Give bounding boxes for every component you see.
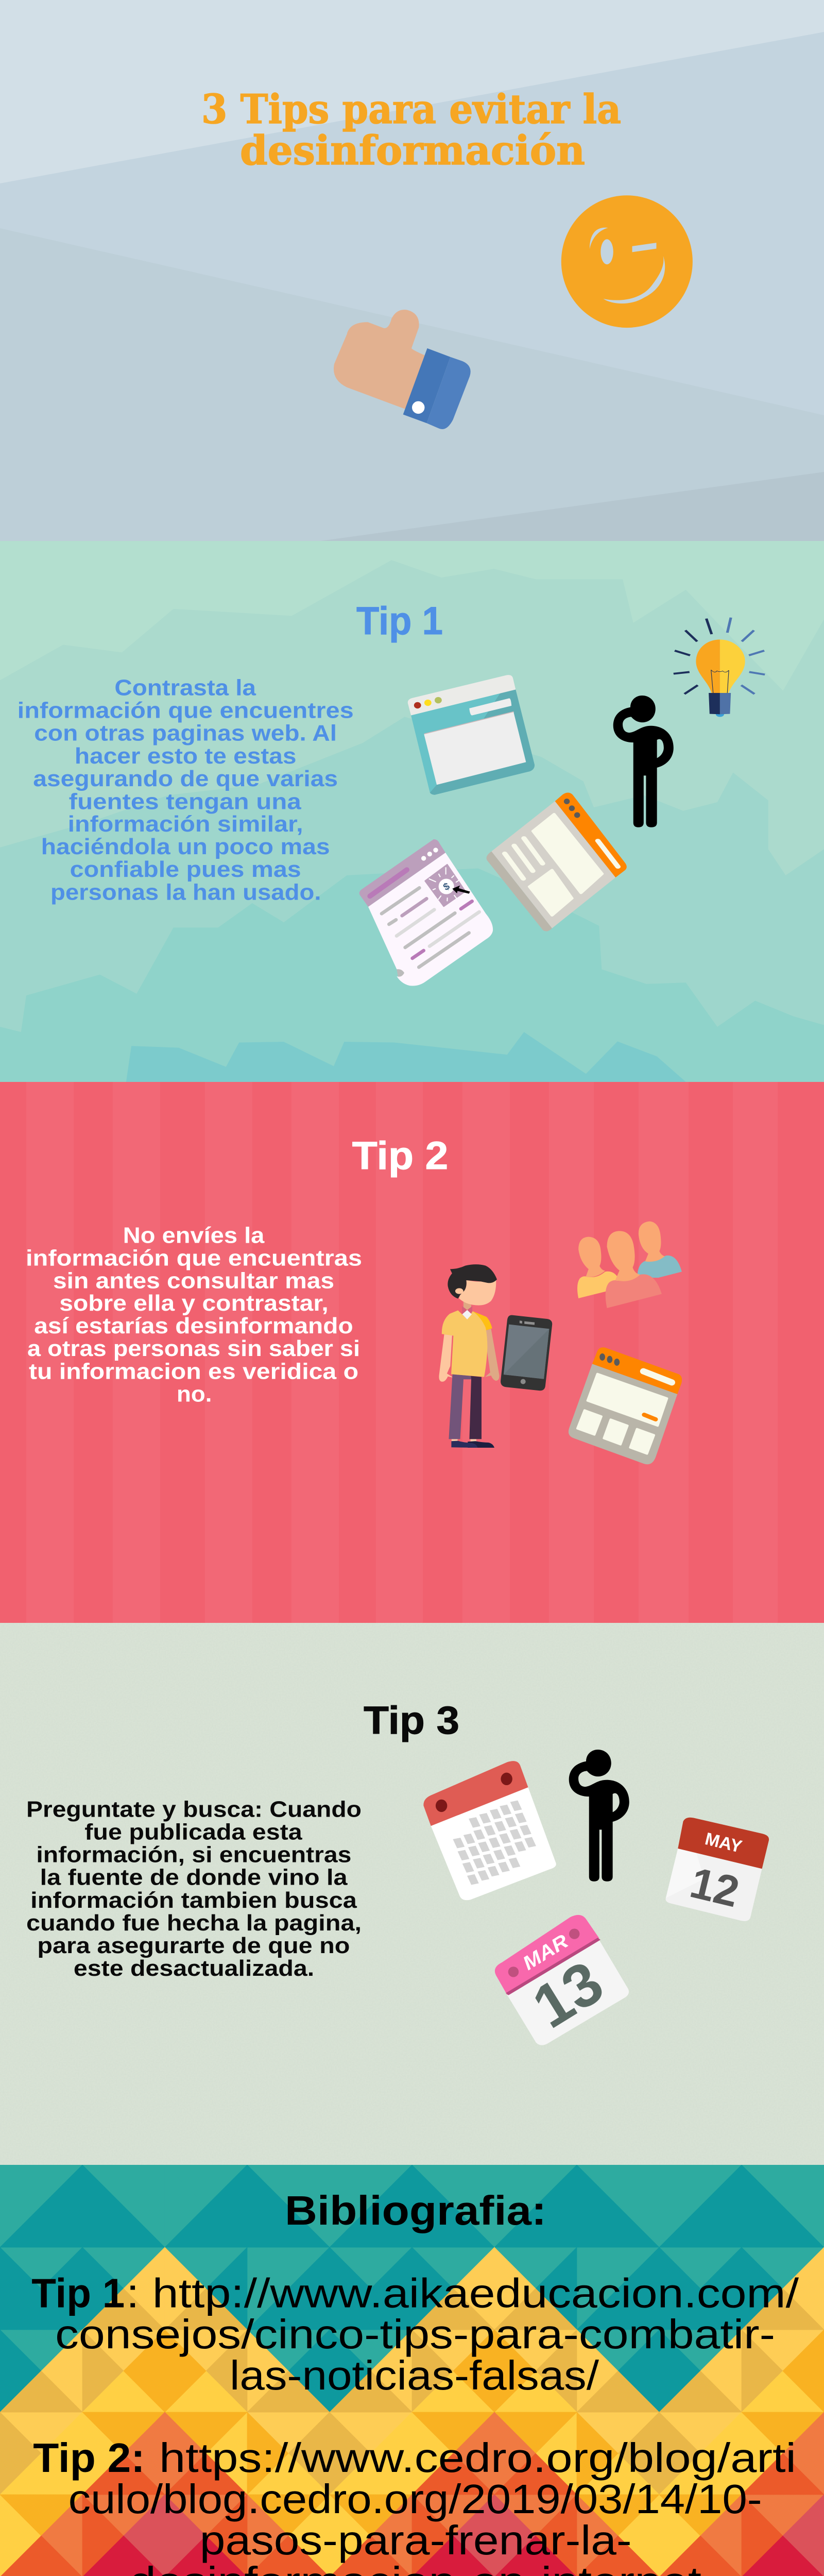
text block: tip 3: este desactualizada.	[74, 1956, 314, 1981]
title: desinformación	[240, 127, 585, 174]
icon: calendar May 12: MAY	[703, 1829, 744, 1857]
text block: tip 1: información similar,	[68, 811, 303, 837]
text block: source tip 1: las-noticias-falsas/	[230, 2352, 599, 2398]
text block: tip 2: sin antes consultar mas	[53, 1268, 334, 1293]
icon: calendar May 12	[666, 1818, 769, 1921]
text block: source tip 1: Tip 1	[31, 2270, 125, 2316]
panel: tip 1	[0, 541, 824, 1082]
panel: tip 2	[0, 1082, 824, 1623]
text block: tip 2	[26, 1223, 362, 1407]
icon: calendar Mar 13: 13	[522, 1948, 615, 2041]
icon: web document	[359, 839, 493, 986]
panel: header	[0, 0, 824, 541]
text block: source tip 2	[33, 2435, 796, 2576]
icon: smartphone	[501, 1315, 552, 1391]
panel: bibliography	[0, 2165, 824, 2576]
icon: thinking person	[613, 696, 674, 827]
text block: source tip 2: culo/blog.cedro.org/2019/03/14/10-	[68, 2476, 762, 2522]
text block: tip 1: con otras paginas web. Al	[34, 720, 337, 745]
heading: Tip 1: Tip 1	[356, 599, 443, 643]
text block: tip 1: fuentes tengan una	[69, 789, 301, 815]
text block: tip 1: información que encuentres	[18, 698, 354, 723]
text block: tip 2: a otras personas sin saber si	[27, 1336, 360, 1361]
text block: tip 3: cuando fue hecha la pagina,	[26, 1910, 362, 1936]
icon: winking face	[561, 195, 693, 328]
icon: man with shirt	[439, 1264, 500, 1448]
title: 3 Tips para evitar la	[201, 86, 621, 133]
text block: tip 1: confiable pues mas	[70, 857, 301, 882]
icon: browser window teal	[408, 675, 535, 795]
text block: source tip 1	[31, 2270, 799, 2398]
text block: tip 2: sobre ella y contrastar,	[59, 1291, 329, 1316]
text block: tip 3: la fuente de donde vino la	[40, 1865, 348, 1890]
text block: tip 1	[18, 675, 354, 905]
heading: Tip 3: Tip 3	[364, 1699, 459, 1742]
icon: calendar Mar 13	[495, 1915, 629, 2045]
heading: Bibliografia: Bibliografia:	[285, 2188, 546, 2233]
text block: tip 2: así estarías desinformando	[34, 1313, 353, 1338]
text block: tip 2: No envíes la	[123, 1223, 265, 1248]
text block: tip 2: no.	[177, 1382, 212, 1407]
text block: source tip 2: Tip 2:	[33, 2435, 145, 2481]
icon: wall calendar	[423, 1761, 556, 1900]
text block: tip 3: fue publicada esta	[84, 1820, 302, 1845]
text block: tip 1: hacer esto te estas	[75, 743, 297, 769]
text block: tip 3: Preguntate y busca: Cuando	[26, 1797, 362, 1822]
icon: group of people	[577, 1222, 682, 1308]
text block: source tip 2: https://www.cedro.org/blog/arti	[159, 2435, 796, 2481]
title	[201, 86, 621, 174]
text block: tip 1: asegurando de que varias	[33, 766, 338, 791]
text block: tip 2: información que encuentras	[26, 1245, 362, 1270]
text block: tip 3: información, si encuentras	[36, 1842, 351, 1867]
text block: source tip 1: consejos/cinco-tips-para-combatir-	[55, 2311, 775, 2357]
text block: tip 3: información tambien busca	[30, 1888, 357, 1913]
icon: browser window orange	[487, 793, 627, 931]
icon: web document: $	[441, 881, 452, 893]
icon: calendar Mar 13: MAR	[519, 1930, 572, 1975]
panel: tip 3	[0, 1623, 824, 2165]
text block: tip 1: Contrasta la	[114, 675, 256, 701]
icon: thumbs up	[334, 310, 471, 429]
text block: source tip 1: : http://www.aikaeducacion.com/	[126, 2270, 799, 2316]
icon: web page	[569, 1347, 682, 1464]
text block: tip 1: haciéndola un poco mas	[41, 834, 330, 859]
icon: thinking person	[569, 1750, 629, 1882]
text block: tip 2: tu informacion es veridica o	[29, 1359, 358, 1384]
text block: tip 1: personas la han usado.	[50, 879, 321, 905]
text block: tip 3: para asegurarte de que no	[37, 1933, 350, 1958]
text block: source tip 2: pasos-para-frenar-la-	[200, 2517, 632, 2563]
icon: calendar May 12: 12	[685, 1858, 744, 1917]
heading: Tip 2: Tip 2	[352, 1134, 448, 1178]
text block: tip 3	[26, 1797, 362, 1981]
icon: light bulb	[674, 618, 765, 717]
